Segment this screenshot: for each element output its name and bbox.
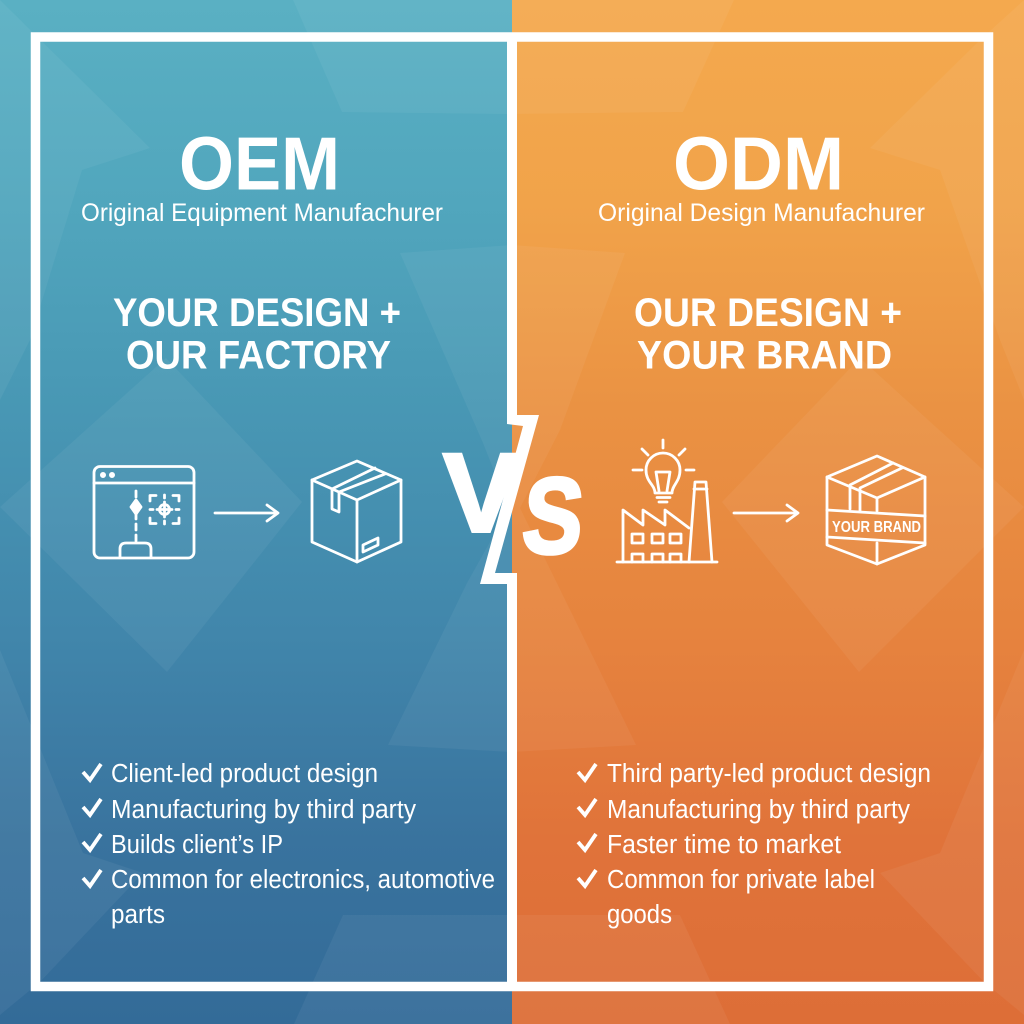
list: OEM features [83, 760, 495, 929]
arrow: design to box [215, 505, 278, 521]
check item: manufacturing: Manufacturing by third party [111, 796, 416, 824]
heading: ODM: ODM [673, 122, 844, 206]
slogan: OEM: YOUR DESIGN + [113, 291, 401, 335]
VS badge: V [443, 430, 519, 556]
check item: faster time: Faster time to market [607, 831, 841, 859]
check item: common for electronics: Common for electronics, automotive [111, 866, 495, 894]
check item: common for electronics: parts [111, 901, 165, 929]
slogan: OEM: OUR FACTORY [126, 334, 391, 378]
icon: design window [94, 466, 194, 558]
check item: common for electronics [83, 866, 495, 929]
subtitle: OEM: Original Equipment Manufachurer [81, 199, 443, 227]
slogan: ODM: OUR DESIGN + [634, 291, 902, 335]
check item: third party-led: Third party-led product design [607, 760, 931, 788]
slogan: ODM [634, 291, 902, 378]
check item: manufacturing: Manufacturing by third party [607, 796, 910, 824]
check item: private label: goods [607, 901, 672, 929]
check item: private label [578, 866, 875, 929]
heading: OEM: OEM [179, 122, 340, 206]
icon: branded box [827, 456, 925, 564]
VS badge: S [518, 455, 589, 576]
subtitle: ODM: Original Design Manufachurer [598, 199, 925, 227]
slogan: ODM: YOUR BRAND [637, 334, 892, 378]
arrow: factory to branded box [734, 505, 798, 521]
slogan: OEM [113, 291, 401, 378]
icon: branded box: YOUR BRAND [832, 519, 921, 536]
icon: factory with light bulb [617, 440, 717, 562]
check item: builds IP: Builds client’s IP [111, 831, 283, 859]
check item: client-led: Client-led product design [111, 760, 378, 788]
lightning divider [480, 40, 539, 984]
icon: package box [312, 461, 401, 562]
check item: private label: Common for private label [607, 866, 875, 894]
list: ODM features [578, 760, 931, 929]
panel: OEM background [0, 0, 512, 1024]
panel: ODM background [512, 0, 1024, 1024]
VS badge [443, 430, 589, 576]
